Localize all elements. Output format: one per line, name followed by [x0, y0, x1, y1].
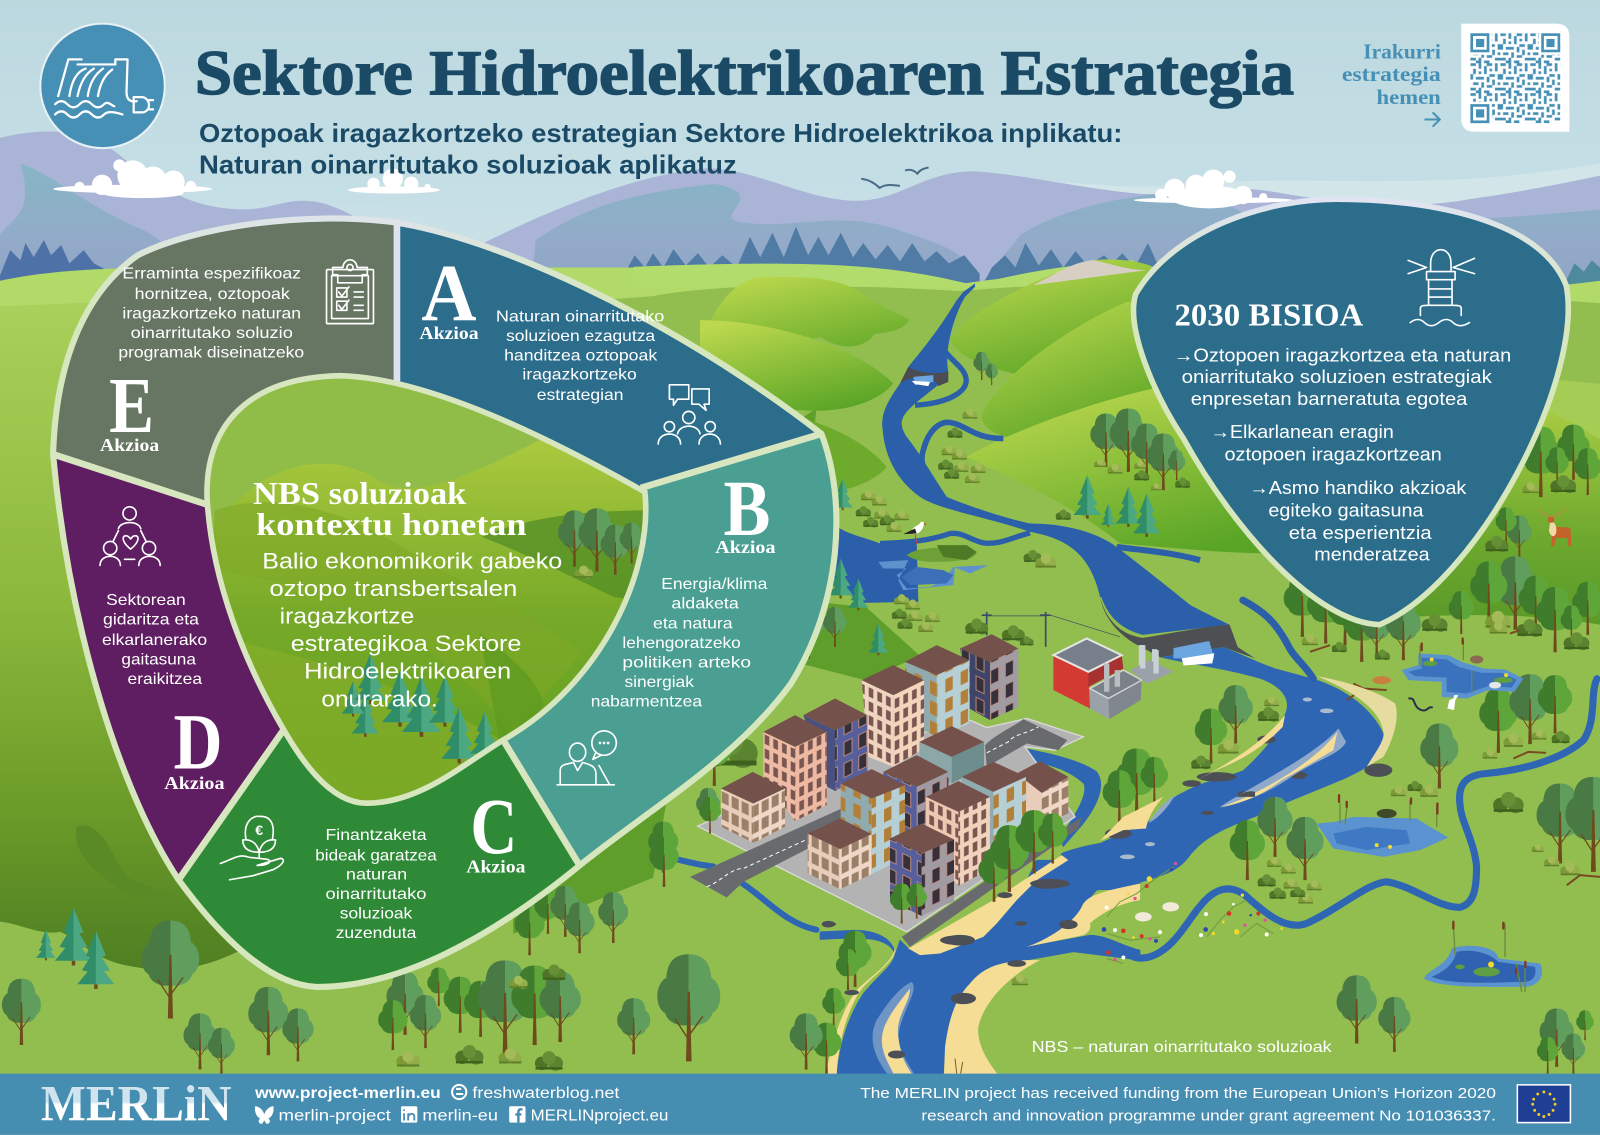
vision text: egiteko gaitasuna	[1268, 499, 1424, 520]
NBS body text: iragazkortze	[280, 604, 414, 629]
EU flag	[1517, 1085, 1570, 1123]
ponds	[1402, 653, 1523, 698]
title: Sektore Hidroelektrikoaren Estrategia	[195, 38, 1294, 108]
A text	[496, 309, 664, 404]
A letter: A	[421, 248, 477, 339]
E text: iragazkortzeko naturan	[122, 306, 301, 323]
D text: gidaritza eta	[103, 612, 199, 629]
A text: Naturan oinarritutako	[496, 309, 664, 326]
vision heading: 2030 BISIOA	[1174, 298, 1363, 333]
sheep	[1135, 902, 1179, 922]
NBS body text	[262, 549, 562, 711]
B text: politiken arteko	[622, 655, 751, 672]
panel: action D	[100, 507, 225, 793]
footer links: MERLINproject.eu	[531, 1108, 668, 1125]
ground plate	[698, 718, 1083, 932]
panel: action E	[100, 260, 373, 455]
B letter: B	[723, 465, 770, 553]
B text: aldaketa	[671, 595, 739, 612]
trees on the far right slope	[1422, 425, 1600, 652]
QR call to action: estrategia	[1342, 62, 1441, 86]
C letter: Akzioa	[466, 857, 526, 877]
A text: estrategian	[537, 387, 623, 404]
A text: soluzioen ezagutza	[506, 328, 656, 345]
icon: speaker at podium	[557, 731, 616, 785]
trees, bushes and wildlife along the upper valley	[790, 352, 1190, 659]
vision text: →Elkarlanean eragin	[1210, 421, 1394, 442]
C text: Finantzaketa	[326, 827, 427, 844]
mountains	[0, 132, 1600, 337]
river delta and sand bars	[820, 855, 1140, 1075]
right-side hill	[1327, 403, 1600, 625]
C letter: C	[470, 783, 517, 871]
E text	[118, 266, 304, 361]
E text: hornitzea, oztopoak	[135, 286, 290, 303]
social icons	[255, 1085, 526, 1124]
electricity pylons	[982, 612, 1120, 647]
panel: action B	[557, 465, 776, 785]
footer links	[254, 1085, 668, 1125]
footer links: www.project-merlin.eu	[254, 1085, 441, 1102]
trees, ponds and wildlife on the right bank	[1100, 573, 1600, 1074]
vision text: eta esperientzia	[1289, 522, 1432, 543]
C text: oinarritutako	[326, 886, 427, 903]
A text: handitzea oztopoak	[504, 347, 657, 364]
C text: zuzenduta	[336, 925, 417, 942]
landscape: green ground and hills	[0, 268, 1600, 1082]
panel: action C	[220, 783, 526, 942]
subtitle	[199, 118, 1122, 180]
sector E	[56, 222, 394, 500]
B letter: Akzioa	[715, 537, 776, 557]
D text: Sektorean	[106, 592, 186, 609]
NBS body text: oztopo transbertsalen	[269, 576, 517, 601]
footer links: merlin-eu	[422, 1108, 498, 1125]
C text: bideak garatzea	[315, 847, 437, 864]
footer bar	[0, 1074, 1600, 1135]
subtitle: Oztopoak iragazkortzeko estrategian Sektore Hidroelektrikoa inplikatu:	[199, 118, 1122, 148]
heron and snake	[1408, 695, 1458, 710]
roads	[690, 719, 1082, 947]
D text	[102, 592, 207, 688]
reeds	[1340, 640, 1525, 992]
E letter: E	[109, 362, 154, 450]
vision text: oniarritutako soluzioen estrategiak	[1182, 366, 1493, 387]
header logo: hydro dam icon	[40, 24, 165, 148]
subtitle: Naturan oinarritutako soluzioak aplikatuz	[199, 150, 737, 180]
vision text	[1173, 344, 1511, 564]
QR call to action	[1342, 39, 1441, 127]
icon: caring team	[100, 507, 160, 565]
D letter: D	[173, 699, 222, 787]
upper river with small dam and lake	[820, 283, 1217, 627]
NBS body text: onurarako.	[321, 686, 438, 711]
green hills around upper river	[633, 260, 1283, 554]
D letter: Akzioa	[164, 773, 225, 793]
NBS footnote: NBS – naturan oinarritutako soluzioak	[1032, 1039, 1332, 1056]
A text: iragazkortzeko	[522, 367, 637, 384]
MERLIN logo: MERLiN	[41, 1077, 232, 1133]
sector A	[400, 226, 814, 486]
icon: hand holding plant and euro coin: €	[255, 823, 263, 839]
clouds	[53, 159, 1293, 208]
QR call to action: Irakurri	[1363, 39, 1441, 63]
fish	[1120, 697, 1333, 859]
NBS body text: Hidroelektrikoaren	[304, 659, 511, 684]
city trees	[649, 797, 1067, 924]
animals	[1372, 655, 1501, 818]
B text: lehengoratzeko	[622, 635, 741, 652]
birds	[861, 168, 929, 188]
deer	[1539, 507, 1571, 546]
B text: nabarmentzea	[591, 693, 702, 710]
panel: central NBS blob	[194, 368, 653, 816]
E text: Erraminta espezifikoaz	[122, 266, 301, 283]
panel: action A	[419, 248, 720, 444]
D text: gaitasuna	[121, 651, 196, 668]
NBS heading: kontextu honetan	[256, 507, 527, 542]
sector B	[508, 438, 834, 861]
funding statement: research and innovation programme under grant agreement No 101036337.	[921, 1109, 1496, 1125]
footer links: freshwaterblog.net	[472, 1085, 620, 1102]
sector dividers	[53, 204, 821, 880]
E letter: Akzioa	[100, 435, 159, 455]
sector outer border	[53, 218, 836, 987]
icon: clipboard checklist	[327, 260, 373, 324]
QR call to action: hemen	[1377, 85, 1441, 109]
panel: action sectors	[50, 215, 840, 990]
C text	[315, 827, 437, 942]
B text: eta natura	[653, 616, 733, 633]
fallen branches	[1310, 630, 1600, 885]
QR code	[1461, 24, 1569, 132]
B text: sinergiak	[624, 674, 694, 691]
funding statement: The MERLIN project has received funding from the European Union’s Horizon 2020	[860, 1086, 1496, 1102]
sky background	[0, 0, 1600, 306]
vision text: oztopoen iragazkortzean	[1224, 443, 1442, 464]
vision text: →Oztopoen iragazkortzea eta naturan	[1173, 344, 1511, 365]
C text: naturan	[346, 867, 407, 884]
NBS heading	[253, 476, 527, 542]
panel: 2030 vision	[1134, 199, 1568, 625]
factory	[1053, 638, 1173, 719]
NBS heading: NBS soluzioak	[253, 476, 467, 511]
lower river, reservoir and dam	[666, 550, 1597, 1075]
footer links: merlin-project	[279, 1108, 392, 1125]
vision text: enpresetan barneratuta egotea	[1191, 388, 1468, 409]
rocks on the bank	[824, 879, 1070, 945]
buildings	[721, 634, 1068, 916]
stork	[903, 522, 926, 544]
E text: oinarritutako soluzio	[131, 325, 293, 342]
sector D	[56, 458, 280, 874]
vision text: menderatzea	[1314, 543, 1430, 564]
NBS body text: Balio ekonomikorik gabeko	[262, 549, 562, 574]
funding statement	[860, 1086, 1496, 1125]
NBS body text: estrategikoa Sektore	[291, 631, 521, 656]
C text: soluzioak	[340, 906, 413, 923]
icon: hand holding plant and euro coin	[220, 816, 283, 880]
vision text: →Asmo handiko akzioak	[1249, 477, 1467, 498]
B text	[591, 576, 768, 710]
A letter: Akzioa	[419, 323, 479, 343]
rocks	[1105, 736, 1392, 839]
dark hill below panel B	[510, 408, 920, 934]
icon: lighthouse	[1408, 250, 1474, 326]
sector C	[182, 735, 576, 984]
trees and forest	[2, 725, 872, 1074]
town: isometric city block	[649, 634, 1173, 947]
B text: Energia/klima	[661, 576, 768, 593]
left slope behind panels	[0, 296, 245, 970]
icon: people in discussion	[658, 385, 720, 444]
wildflowers	[1102, 862, 1283, 964]
D text: elkarlanerako	[102, 632, 207, 649]
D text: eraikitzea	[128, 671, 202, 688]
arrow to QR	[1424, 112, 1440, 127]
E text: programak diseinatzeko	[118, 344, 304, 361]
